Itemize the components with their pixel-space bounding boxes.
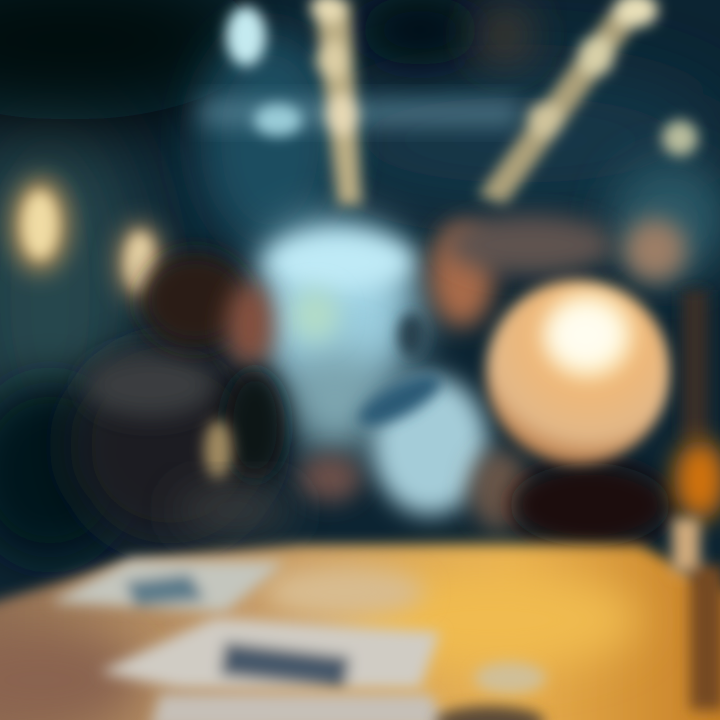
- ceiling light: small right: [662, 120, 698, 156]
- table: dark lower shade: [435, 706, 545, 720]
- dark area under lamp: [510, 463, 670, 547]
- ceiling light: top center: [226, 6, 266, 66]
- ceiling light strip: vertical: [310, 0, 362, 205]
- lamp stand: right edge: [674, 290, 720, 520]
- bottle: right foreground: [672, 518, 720, 710]
- ceiling light strip: diagonal: [478, 0, 658, 205]
- wall lamp: left: [10, 177, 70, 273]
- wall lamp: center left: [116, 222, 164, 302]
- ceiling light: beam glow: [254, 104, 302, 136]
- papers: front sheet: [100, 618, 440, 688]
- papers: upper left sheet: [50, 560, 285, 612]
- person: right figure: [352, 215, 687, 530]
- papers: lower sheet: [150, 694, 450, 720]
- lamp: large glowing globe: [486, 280, 670, 464]
- ceiling beam across: [200, 100, 520, 126]
- table: warm wooden surface: [0, 545, 720, 720]
- background: bright window behind figures: [250, 220, 420, 455]
- person: left figure: [70, 252, 362, 545]
- papers: right corner sheet: [474, 662, 546, 694]
